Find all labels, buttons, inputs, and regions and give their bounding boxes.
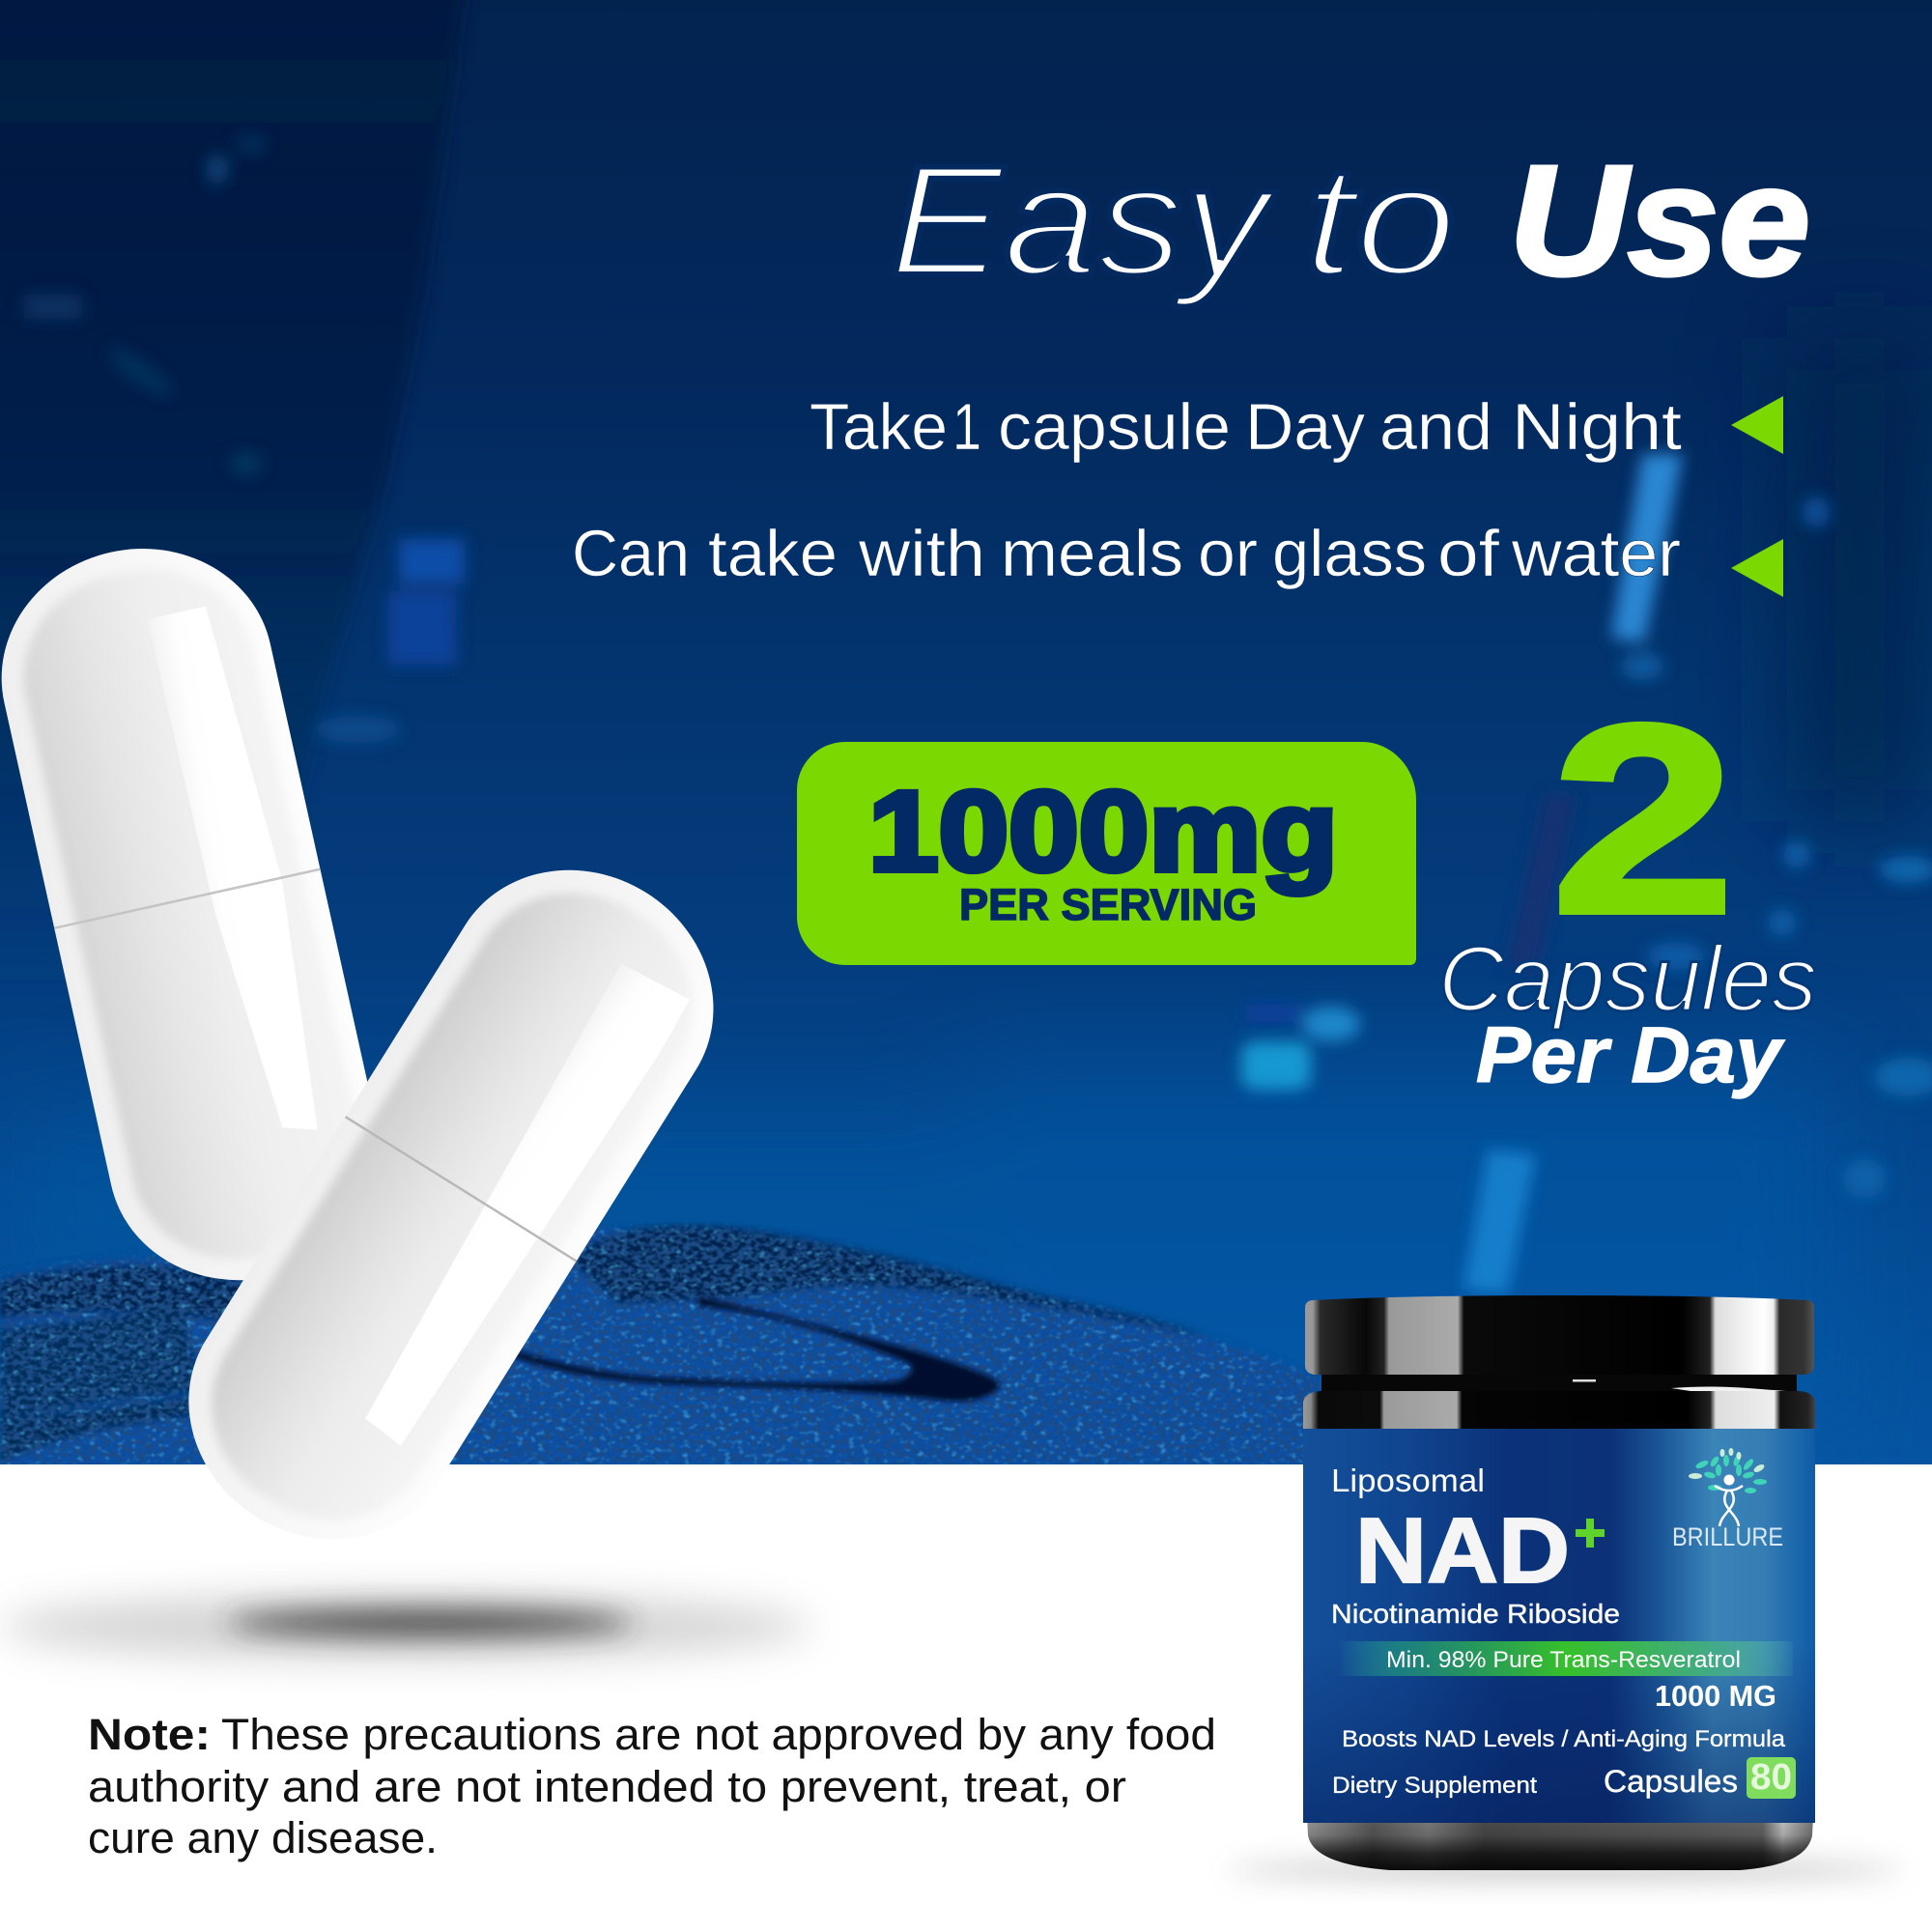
disclaimer note: These precautions are not approved by any food [221, 1710, 1216, 1759]
icon: green arrow [1731, 539, 1783, 597]
title: Easy [890, 133, 1278, 308]
ground: left shadow [0, 1309, 203, 1420]
capsule count badge: 80 [1750, 1757, 1792, 1798]
disclaimer note [88, 1710, 1216, 1862]
instruction: take one capsule: capsule [998, 390, 1231, 464]
brand logo [1672, 1448, 1783, 1551]
brand logo: BRILLURE [1672, 1522, 1783, 1551]
jar base [1307, 1816, 1813, 1870]
disclaimer note: authority and are not intended to prevent, treat, or [88, 1762, 1126, 1811]
jar label: 1000 MG [1655, 1679, 1776, 1713]
disclaimer note: cure any disease. [88, 1813, 438, 1862]
ground: dark loop shape [493, 1296, 1001, 1401]
ground: textured surface [0, 1226, 1352, 1464]
capsules per day: Per Day [1476, 1011, 1786, 1099]
instruction: meals or water: glass [1272, 517, 1427, 590]
disclaimer note: Note: [88, 1710, 211, 1759]
instruction: meals or water: Can [572, 517, 690, 590]
jar label: Nicotinamide Riboside [1331, 1599, 1620, 1629]
title [890, 133, 1810, 308]
icon: green plus [1576, 1519, 1605, 1548]
instruction: take one capsule: and [1379, 390, 1492, 464]
capsule: back pill [0, 523, 404, 1306]
jar label [1303, 1429, 1815, 1823]
product jar [1227, 1295, 1903, 1877]
capsules per day: 2 [1551, 668, 1735, 969]
jar shoulder [1303, 1391, 1815, 1430]
title: Use [1509, 133, 1810, 308]
title: to [1304, 133, 1457, 308]
instruction: take one capsule: Take [810, 390, 948, 464]
instruction: meals or water: water [1511, 517, 1681, 590]
dosage badge: PER SERVING [959, 880, 1257, 929]
instruction: meals or water: with [858, 517, 985, 590]
instruction: meals or water [572, 517, 1783, 597]
instruction: take one capsule: 1 [952, 390, 981, 464]
instruction: meals or water: meals [1001, 517, 1183, 590]
jar label: Min. 98% Pure Trans-Resveratrol [1386, 1647, 1741, 1673]
capsule: front pill [140, 820, 761, 1589]
instruction: meals or water: of [1437, 517, 1499, 590]
jar lid [1305, 1295, 1814, 1375]
jar label: Capsules [1604, 1764, 1738, 1799]
ground: dark ridge [0, 1226, 1208, 1338]
capsules per day: Capsules [1438, 927, 1817, 1031]
dosage badge [797, 742, 1416, 965]
jar label: NAD [1355, 1499, 1570, 1603]
jar label: Dietry Supplement [1332, 1773, 1537, 1799]
icon: green arrow [1731, 396, 1783, 454]
instruction: meals or water: take [708, 517, 838, 590]
bottom white panel [0, 1464, 1932, 1932]
instruction: take one capsule: Day [1245, 390, 1365, 464]
background: blurred city scene [0, 0, 1932, 1464]
dosage badge: 1000mg [868, 768, 1338, 895]
capsules per day [1438, 668, 1817, 1099]
jar neck [1321, 1372, 1797, 1397]
background: dark tower [0, 0, 465, 856]
jar label: Liposomal [1331, 1463, 1485, 1498]
instruction: meals or water: or [1198, 517, 1258, 590]
instruction: take one capsule: Night [1512, 390, 1682, 464]
instruction: take one capsule [810, 390, 1783, 464]
jar label: Boosts NAD Levels / Anti-Aging Formula [1342, 1726, 1786, 1752]
pills floor shadow [0, 1594, 811, 1660]
